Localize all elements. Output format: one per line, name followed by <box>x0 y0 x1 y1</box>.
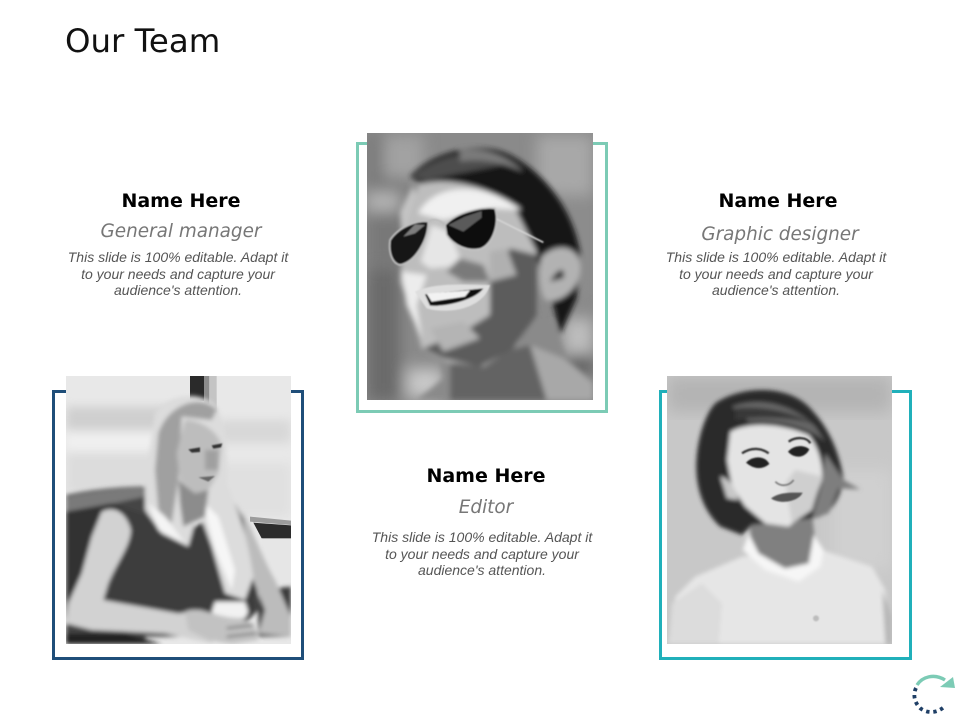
description: to your needs and capture your <box>679 266 873 282</box>
back hair <box>410 148 580 335</box>
description: This slide is 100% editable. Adapt it <box>68 249 288 265</box>
frame: right portrait <box>659 390 912 660</box>
role: Graphic designer <box>701 224 859 245</box>
role: General manager <box>100 220 261 242</box>
description <box>372 529 593 578</box>
sofa <box>66 487 148 644</box>
photo: man with sunglasses <box>367 133 593 400</box>
sunglasses <box>390 208 543 265</box>
frame: centre portrait <box>356 142 608 413</box>
team member: Graphic designer <box>666 190 887 298</box>
title: Our Team <box>65 22 220 60</box>
stubble shading <box>423 248 537 367</box>
hands <box>185 610 258 644</box>
description: This slide is 100% editable. Adapt it <box>666 249 886 265</box>
shirt <box>668 550 892 644</box>
frame: left portrait <box>52 390 304 660</box>
cup <box>212 602 248 618</box>
photo: woman with coffee cup <box>66 376 291 644</box>
forehead highlight <box>418 189 522 220</box>
neck <box>750 513 815 568</box>
nose <box>421 225 460 268</box>
face <box>177 420 222 493</box>
name: Name Here <box>121 190 241 212</box>
description: audience's attention. <box>114 282 242 298</box>
eyes and mouth <box>188 443 222 482</box>
team member: General manager <box>68 190 289 298</box>
hair back <box>145 396 253 600</box>
description: to your needs and capture your <box>81 266 275 282</box>
wispy side hair <box>400 185 420 235</box>
description <box>666 249 887 298</box>
name: Name Here <box>426 465 546 487</box>
name: Name Here <box>718 190 838 212</box>
hair front highlights <box>412 153 510 182</box>
neck and shoulder <box>417 322 593 400</box>
photo: woman with short hair <box>667 376 892 644</box>
team member: Editor <box>372 465 593 578</box>
collar <box>743 533 824 582</box>
mouth <box>415 284 490 311</box>
icon: circular arrow <box>912 674 955 714</box>
dress <box>141 505 262 640</box>
description: audience's attention. <box>418 562 546 578</box>
role: Editor <box>459 497 513 518</box>
face <box>727 425 822 527</box>
ear <box>539 248 581 301</box>
description: This slide is 100% editable. Adapt it <box>372 529 592 545</box>
face <box>400 182 537 367</box>
near arm <box>66 509 222 643</box>
description <box>68 249 289 298</box>
window frame <box>190 376 204 401</box>
facial features <box>742 438 819 621</box>
description: to your needs and capture your <box>385 546 579 562</box>
description: audience's attention. <box>712 282 840 298</box>
far arm <box>242 510 291 637</box>
hair <box>696 390 844 535</box>
